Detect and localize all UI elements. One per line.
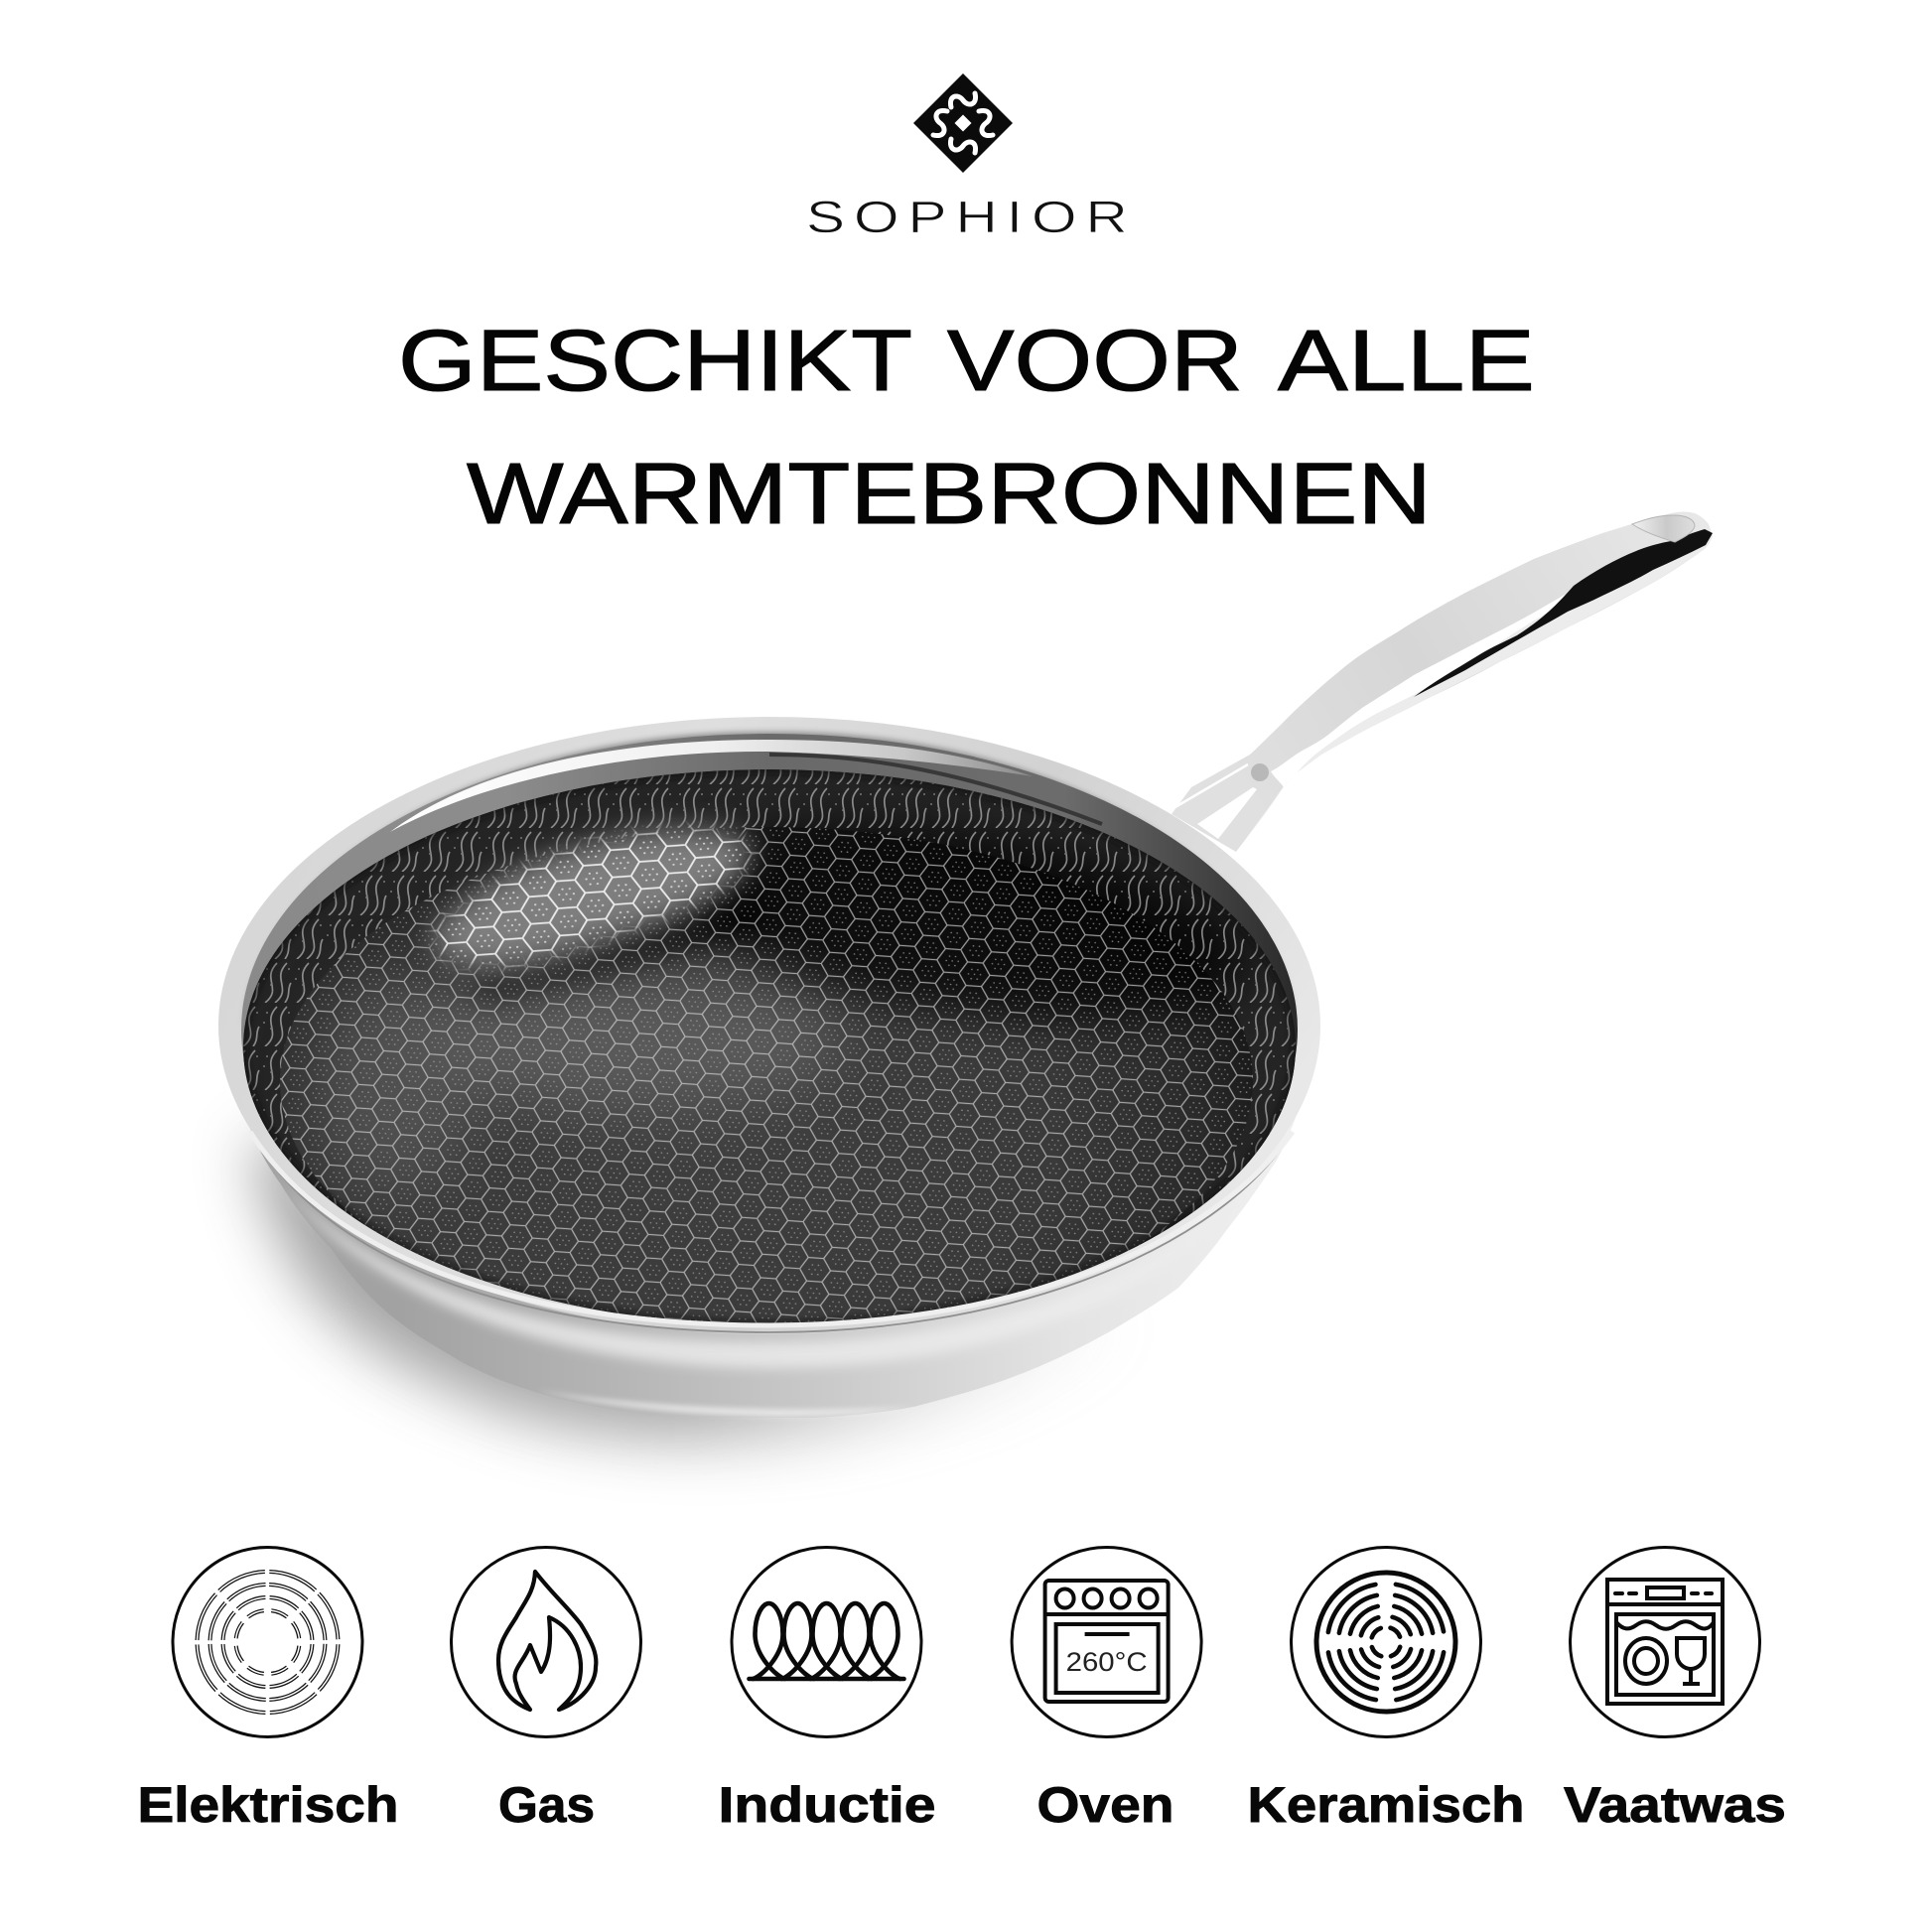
reflection: soft light areas [427,973,844,1112]
pan rim [218,717,1320,1334]
heat source row [137,1547,1786,1833]
body soft light under the lip [281,1184,1251,1368]
title: GESCHIKT [398,313,912,409]
inner wall [241,734,1298,1325]
dark band below highlight [477,908,764,993]
rim lip lines [250,1132,1293,1332]
top right dark reflection [687,816,1253,1037]
title: WARMTEBRONNEN [467,446,1432,542]
label: Gas: Gas [498,1777,595,1833]
wall dark lines [769,755,1102,824]
icon: induction coil [732,1547,921,1737]
dark edge [243,769,1296,1325]
icon: black diamond emblem [913,73,1013,173]
rim inner shadow [243,732,1296,1030]
brand name: SOPHIOR [806,193,1128,242]
body light bottom edge [536,1390,913,1417]
icon: dishwasher [1571,1547,1759,1737]
icon: electric hob [173,1547,362,1737]
icon: oven 260°C [1012,1547,1201,1737]
label: Elektrisch: Elektrisch [137,1777,399,1833]
pan handle [1169,512,1713,852]
pan interior non-stick surface [243,769,1296,1325]
title [398,313,1535,542]
handle slit [1271,584,1584,787]
label: Vaatwas: Vaatwas [1564,1777,1786,1833]
frying pan illustration [218,512,1713,1441]
handle fork highlight [1169,764,1248,811]
hexagon pattern [280,827,1253,1322]
label: Inductie: Inductie [719,1777,935,1833]
highlight hexagons [425,820,759,975]
label: Oven: Oven [1036,1777,1173,1833]
handle lower strap [1236,536,1713,852]
logo: Sophior brand mark [806,73,1128,242]
pan body [243,1033,1303,1418]
flame pattern on the wall [243,769,1296,1245]
title: VOOR [947,313,1243,409]
label: Keramisch: Keramisch [1247,1777,1525,1833]
band around the wall [243,772,1295,1249]
icon: oven 260°C: 260°C [1066,1647,1148,1677]
icon: ceramic hob [1291,1547,1481,1737]
pan shadow [248,1142,1142,1441]
handle fork hole [1251,763,1269,781]
bright highlight [430,830,750,966]
handle fork gap [1197,787,1257,839]
handle end hole [1632,515,1695,542]
handle dark reflection [1414,529,1713,697]
icon: gas flame [451,1547,641,1737]
wall reflection strip [390,740,1033,832]
title: ALLE [1278,313,1535,409]
